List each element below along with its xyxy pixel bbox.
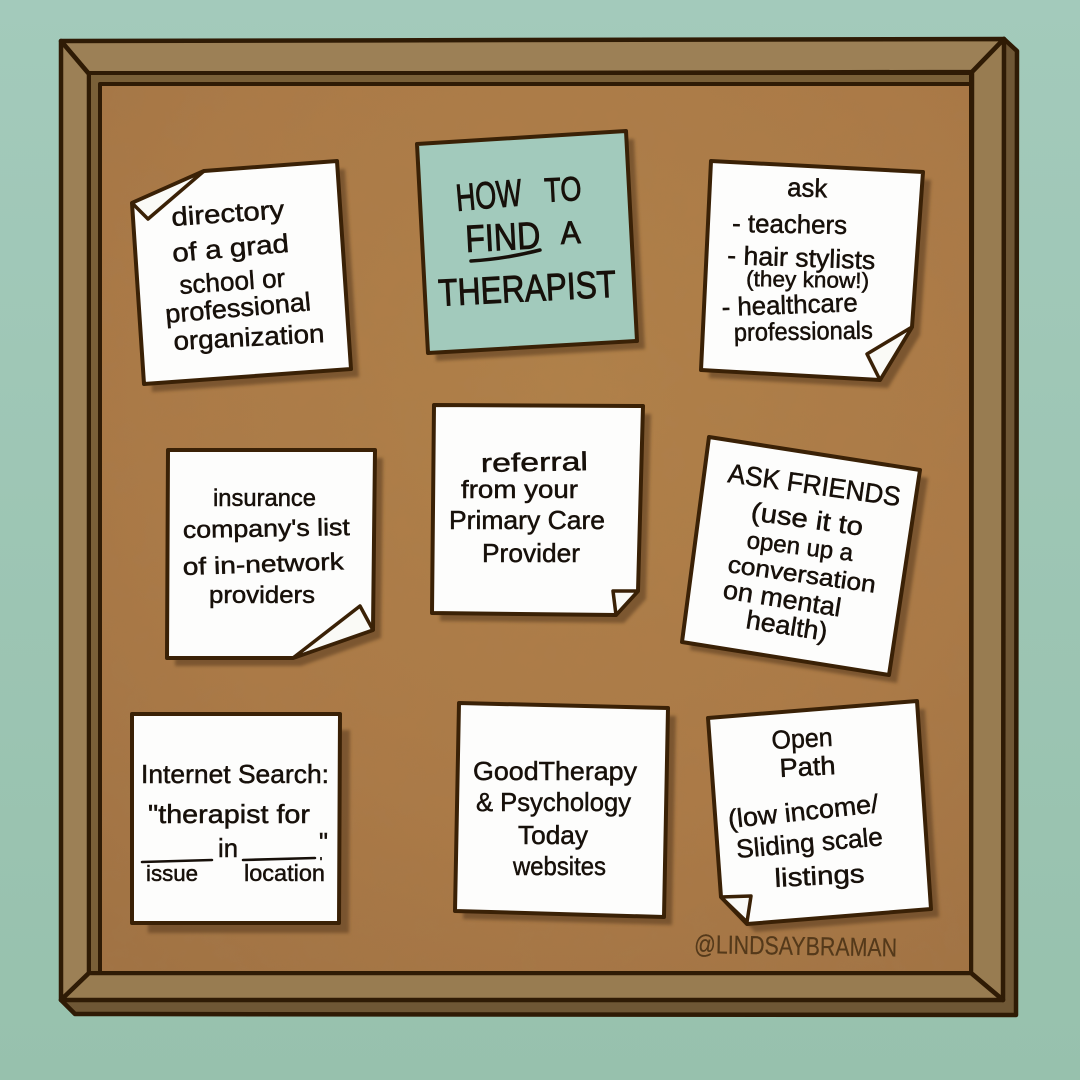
note: ask teachers etc: - teachers <box>732 208 847 240</box>
frame bottom rail <box>61 973 1003 1000</box>
frame left rail <box>61 41 89 1000</box>
frame top rail <box>61 39 1004 74</box>
note: open path <box>708 701 939 932</box>
note: ask friends: conversation <box>726 551 877 599</box>
credit: @LINDSAYBRAMAN <box>694 929 897 963</box>
note: open path: listings <box>774 858 865 893</box>
note: websites: Today <box>518 820 588 850</box>
note: ask friends: open up a <box>745 527 855 567</box>
note: websites <box>455 703 676 925</box>
note: referral <box>432 405 651 623</box>
title note <box>417 131 645 361</box>
note: ask teachers etc: (they know!) <box>746 266 869 293</box>
note: insurance: of in-network <box>182 548 345 581</box>
note: open path: Sliding scale <box>735 821 884 864</box>
note: internet search: in <box>218 833 238 863</box>
note: ask teachers etc: - healthcare <box>721 287 858 322</box>
note: ask teachers etc: professionals <box>734 317 873 347</box>
note: ask friends: ASK FRIENDS <box>726 458 903 512</box>
note: referral: from your <box>461 476 578 504</box>
note: directory: professional <box>164 286 312 329</box>
note: internet search <box>132 714 350 933</box>
frame inner lip <box>89 74 971 973</box>
cork surface <box>89 74 971 973</box>
heading: HOW <box>454 172 524 220</box>
note: directory: directory <box>170 194 285 232</box>
note: directory: organization <box>173 318 325 356</box>
underline <box>471 250 540 261</box>
folded corner <box>293 606 373 658</box>
note: open path: Path <box>779 750 836 783</box>
fill-in blanks <box>142 858 315 862</box>
note: ask friends: (use it to <box>749 496 865 542</box>
title note: A <box>559 214 582 251</box>
title note: TO <box>543 170 582 210</box>
note: insurance: insurance <box>213 485 316 512</box>
folded corner <box>613 591 638 615</box>
note: referral: referral <box>481 446 588 478</box>
note: internet search: Internet Search: <box>141 759 329 789</box>
note: insurance: providers <box>209 582 315 609</box>
folded corner <box>721 896 751 922</box>
note: internet search: " <box>319 827 328 857</box>
note: referral: Primary Care <box>449 505 605 535</box>
note: insurance: company's list <box>183 514 350 544</box>
note: directory: school or <box>178 263 287 300</box>
note: internet search: location <box>244 860 325 886</box>
note: open path: Open <box>771 722 833 755</box>
frame outer depth <box>61 39 1017 1015</box>
note: websites: & Psychology <box>476 787 631 817</box>
note: internet search: issue <box>146 861 198 886</box>
note: internet search: . <box>319 836 323 866</box>
note: websites: websites <box>512 851 606 881</box>
note: directory: of a grad <box>171 228 290 268</box>
note: directory <box>132 161 359 392</box>
title note: THERAPIST <box>437 264 617 315</box>
folded corner <box>132 171 204 219</box>
corkboard frame <box>61 39 1017 1015</box>
note: open path: (low income/ <box>726 788 881 834</box>
note: ask friends: health) <box>744 604 830 647</box>
frame right rail <box>971 39 1004 1000</box>
note: ask teachers etc <box>701 161 931 388</box>
note: ask friends: on mental <box>721 574 843 623</box>
note: insurance <box>167 450 383 666</box>
title note: FIND <box>464 215 541 261</box>
note: ask teachers etc: - hair stylists <box>727 240 876 275</box>
note: websites: GoodTherapy <box>473 756 637 786</box>
note: ask friends <box>682 437 928 683</box>
note: ask teachers etc: ask <box>787 172 829 203</box>
folded corner <box>867 327 912 380</box>
note: internet search: "therapist for <box>148 799 310 829</box>
note: referral: Provider <box>482 538 580 568</box>
